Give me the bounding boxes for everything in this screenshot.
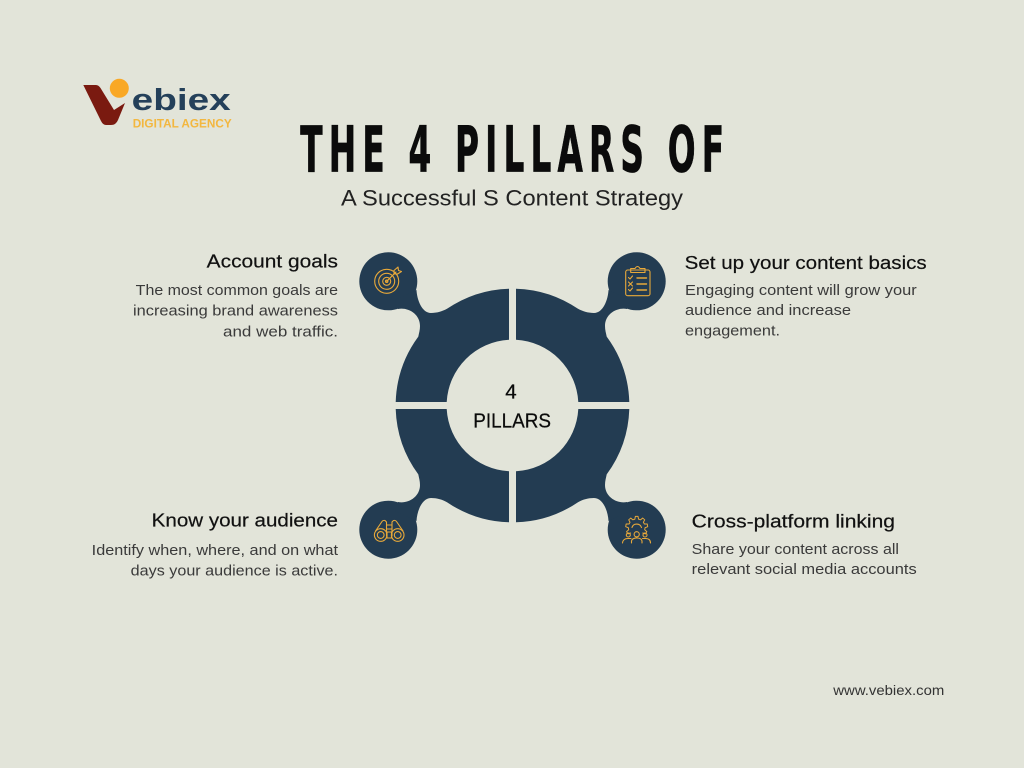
description [685,282,917,340]
description: Engaging content will grow your [685,282,917,299]
diagram: four pillars ring [359,252,666,559]
pillar segment: top right [516,252,666,402]
description: increasing brand awareness [133,303,338,320]
pillar segment: bottom left [359,409,509,559]
website url: www.vebiex.com [832,682,944,698]
title: THE 4 PILLARS OF [300,112,724,186]
description [133,282,338,341]
description: Identify when, where, and on what [92,542,339,559]
description: Share your content across all [692,541,899,558]
center label: 4 pillars: 4 [505,380,517,403]
text block: Know your audience [92,510,339,580]
description [692,541,917,578]
icon: binoculars [374,520,404,541]
logo: Vebiex Digital Agency: ebiex [132,82,232,117]
heading: Cross-platform linking [692,511,895,532]
text block: Set up your content basics [685,252,927,340]
icon: gear with team [622,516,650,543]
icon: clipboard checklist [626,266,650,296]
pillar segment: bottom right [516,409,666,559]
description: engagement. [685,323,780,340]
logo: Vebiex Digital Agency: DIGITAL AGENCY [133,116,232,130]
description: days your audience is active. [131,563,338,580]
description: relevant social media accounts [692,561,917,578]
description: and web traffic. [223,324,338,341]
subtitle: A Successful S Content Strategy [341,186,683,211]
description: The most common goals are [136,282,338,299]
description: audience and increase [685,302,851,319]
heading: Set up your content basics [685,252,927,273]
text block: Account goals [133,251,338,341]
text block: Cross-platform linking [692,511,917,578]
pillar segment: top left [359,252,509,402]
center label: 4 pillars [473,380,551,432]
icon: target with arrow [375,267,402,293]
center label: 4 pillars: PILLARS [473,409,551,432]
heading: Account goals [207,251,338,272]
description [92,542,339,580]
logo: Vebiex Digital Agency [83,79,232,130]
heading: Know your audience [152,510,338,531]
